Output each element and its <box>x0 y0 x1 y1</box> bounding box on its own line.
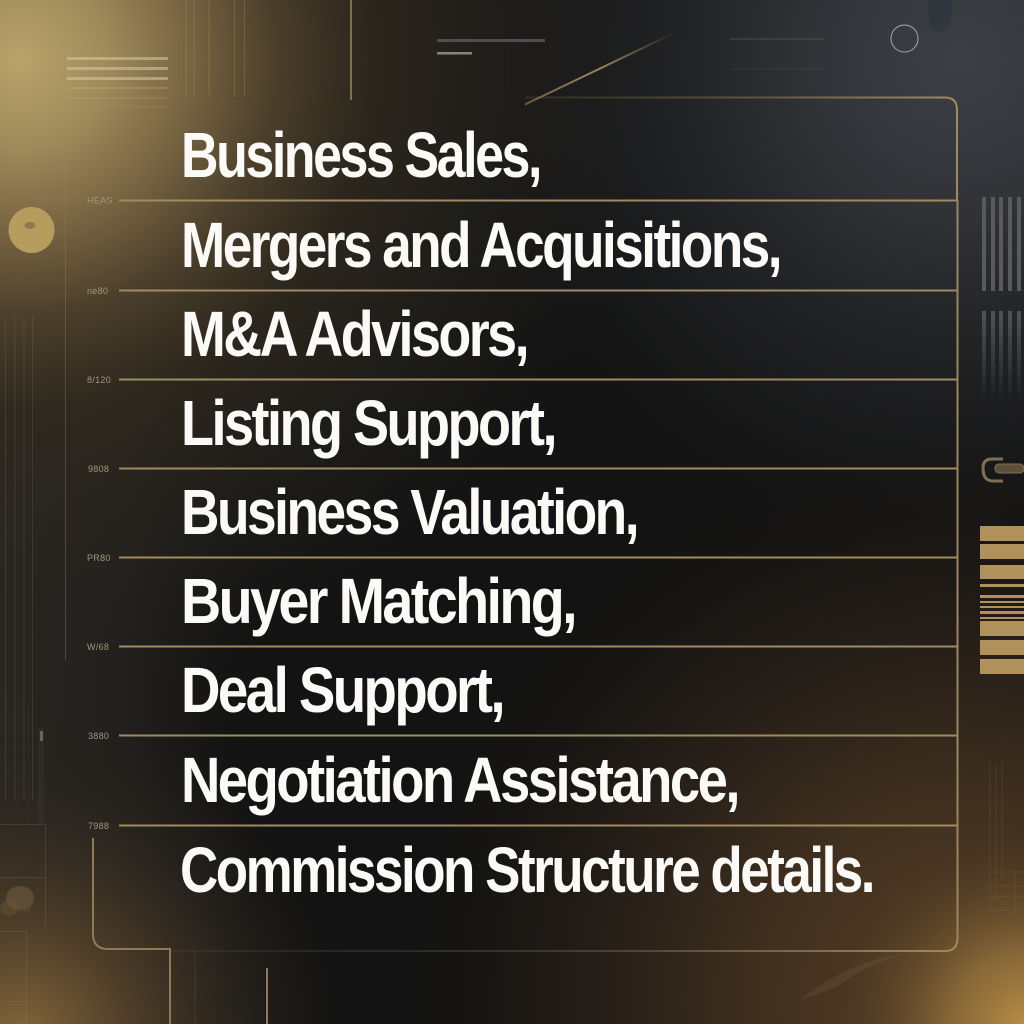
item: mergers and acquisitions: Mergers and Acquisitions, <box>181 209 780 281</box>
row tick labels: ne80 <box>87 286 108 296</box>
decoration: top centre marks <box>437 39 824 69</box>
row dividers <box>119 200 957 826</box>
decoration: lower-right grid <box>990 760 1024 915</box>
row tick labels: PR80 <box>87 553 111 563</box>
panel right edge <box>956 200 958 940</box>
decoration: diagonal line <box>525 33 674 104</box>
icon: gold circle <box>8 207 54 253</box>
row tick labels: 7988 <box>88 821 109 831</box>
item: deal support: Deal Support, <box>181 654 503 726</box>
row tick labels: 8/120 <box>87 375 111 385</box>
item: business sales: Business Sales, <box>181 119 540 191</box>
panel: main frame <box>93 98 958 1024</box>
decoration: left vertical lines <box>6 317 32 800</box>
row tick labels: 3880 <box>88 731 109 741</box>
decoration: top-left stripes <box>67 57 168 108</box>
list: services <box>180 119 873 906</box>
item: m&a advisors: M&A Advisors, <box>181 298 527 370</box>
row tick labels <box>87 196 113 831</box>
item: commission structure details: Commission Structure details. <box>180 834 873 906</box>
row tick labels: 9808 <box>88 464 109 474</box>
decoration: right vertical bars <box>982 197 1021 401</box>
decoration: top divider and left rail <box>66 0 351 660</box>
row tick labels: W/68 <box>87 642 109 652</box>
item: listing support: Listing Support, <box>181 387 555 459</box>
row tick labels: HEAS <box>87 196 113 206</box>
decoration: bottom swoosh <box>800 953 907 1000</box>
item: business valuation: Business Valuation, <box>181 476 637 548</box>
icon: right key <box>983 459 1024 481</box>
item: negotiation assistance: Negotiation Assistance, <box>181 744 738 816</box>
item: buyer matching: Buyer Matching, <box>181 565 575 637</box>
decoration: top vertical lines <box>186 0 244 97</box>
decoration: right barcode <box>980 526 1024 674</box>
icon: thin circle <box>891 25 918 52</box>
decoration: lower-left grid and texture <box>0 700 46 1024</box>
